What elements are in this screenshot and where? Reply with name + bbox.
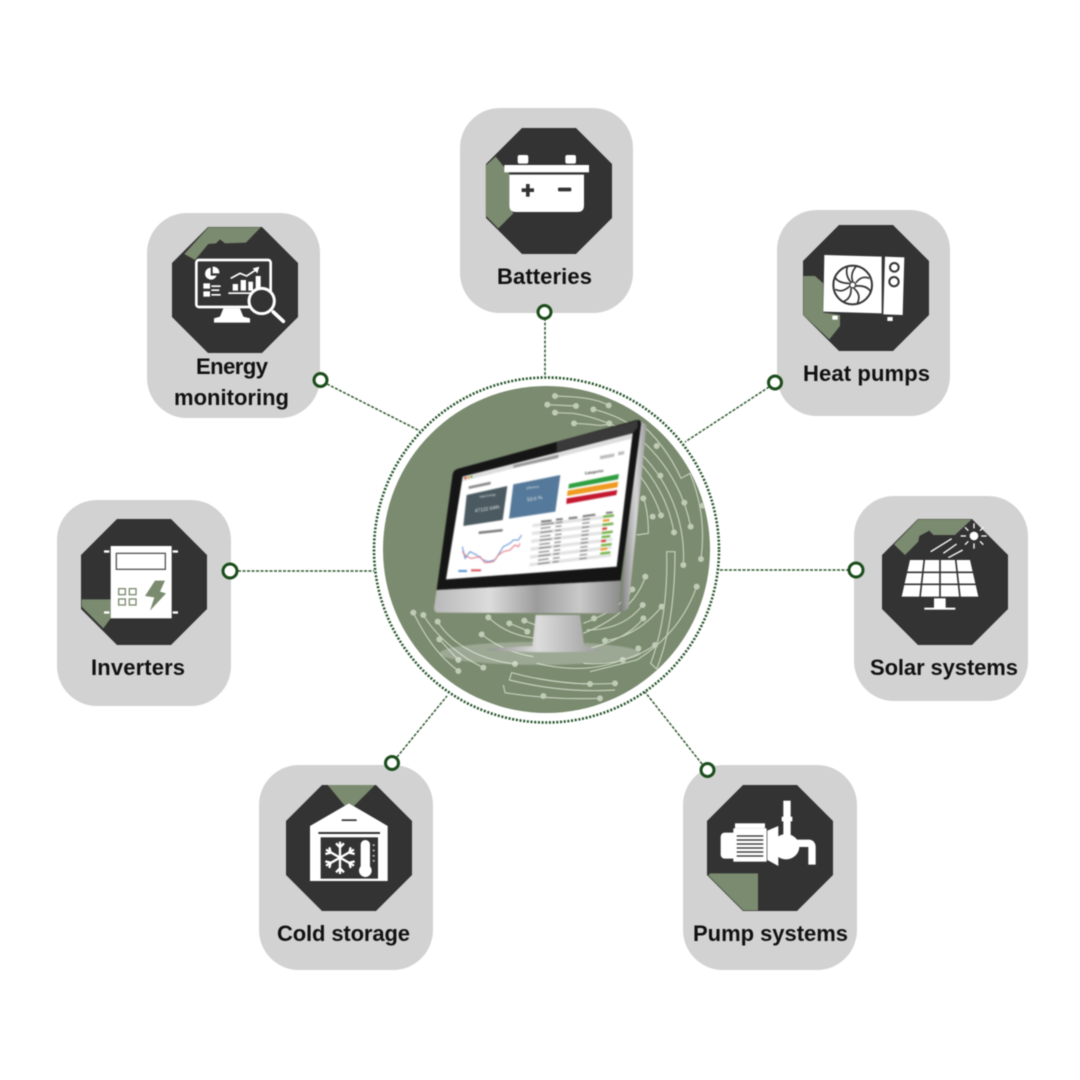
connector: Energy monitoring to hub — [327, 384, 420, 431]
energy tile — [463, 486, 507, 526]
panel: Heat pumps — [777, 210, 950, 416]
chart title — [479, 529, 503, 534]
category bars: Categories — [585, 469, 604, 476]
monitor with dashboard — [434, 420, 647, 665]
tile values: Total Energy — [479, 492, 496, 499]
icon: monitor with magnifier — [172, 227, 298, 353]
label: Solar systems: Solar systems — [870, 655, 1018, 680]
chin — [434, 581, 621, 613]
bezel — [437, 420, 641, 590]
screen — [446, 433, 633, 579]
back edge — [620, 420, 647, 613]
window title bar — [462, 433, 633, 481]
label: Inverters: Inverters — [91, 655, 185, 680]
line chart — [462, 535, 522, 563]
tile values: Efficiency — [526, 484, 540, 490]
label: Energy monitoring: monitoring — [174, 385, 289, 410]
label: Energy monitoring — [174, 354, 289, 410]
panel: Inverters — [57, 500, 231, 706]
tile values — [474, 484, 544, 514]
icon: heat pump unit — [803, 225, 929, 351]
connector: Pump systems to hub — [645, 692, 702, 764]
icon: battery — [486, 128, 612, 254]
icon: inverter — [81, 519, 207, 645]
tile values: 47122 kWh — [474, 504, 500, 514]
connector: Batteries to hub — [544, 318, 546, 377]
chart legend — [458, 569, 481, 572]
panel: Solar systems — [854, 496, 1028, 701]
icon: water pump — [707, 785, 833, 911]
reflection disc — [440, 642, 640, 665]
central hub — [374, 378, 719, 722]
node: Solar systems — [849, 563, 863, 577]
label: Pump systems: Pump systems — [693, 921, 848, 946]
node: Cold storage — [386, 756, 398, 770]
connector: Solar systems to hub — [719, 569, 849, 571]
label: Energy monitoring: Energy — [196, 354, 269, 379]
connector: Cold storage to hub — [397, 696, 447, 757]
icon: solar panel and sun — [882, 519, 1008, 645]
label: Batteries: Batteries — [497, 264, 592, 289]
node: Pump systems — [701, 764, 714, 776]
panel: Batteries — [460, 108, 633, 313]
panel: Energy monitoring — [147, 213, 320, 418]
data table — [529, 514, 614, 567]
percentage tile — [509, 475, 560, 519]
panel: Pump systems — [683, 765, 857, 970]
label: Heat pumps: Heat pumps — [803, 361, 930, 386]
circuit traces — [410, 393, 706, 701]
green disc — [383, 386, 710, 713]
stand — [487, 615, 602, 652]
icon: cold storage building — [286, 785, 412, 911]
label: Cold storage: Cold storage — [277, 921, 410, 946]
table header — [541, 511, 613, 523]
tile values: 53.6 % — [527, 495, 544, 503]
node: Inverters — [223, 564, 237, 578]
dashboard heading — [469, 482, 491, 489]
panel: Cold storage — [259, 765, 433, 970]
category bars — [566, 469, 619, 504]
dotted ring — [374, 378, 719, 722]
connector: Heat pumps to hub — [685, 387, 769, 442]
node: Batteries — [538, 306, 551, 318]
bezel glare — [557, 421, 638, 452]
node: Heat pumps — [768, 376, 782, 389]
connector: Inverters to hub — [238, 570, 374, 572]
title text bar — [513, 455, 558, 468]
node: Energy monitoring — [314, 374, 327, 386]
header buttons — [600, 451, 624, 459]
